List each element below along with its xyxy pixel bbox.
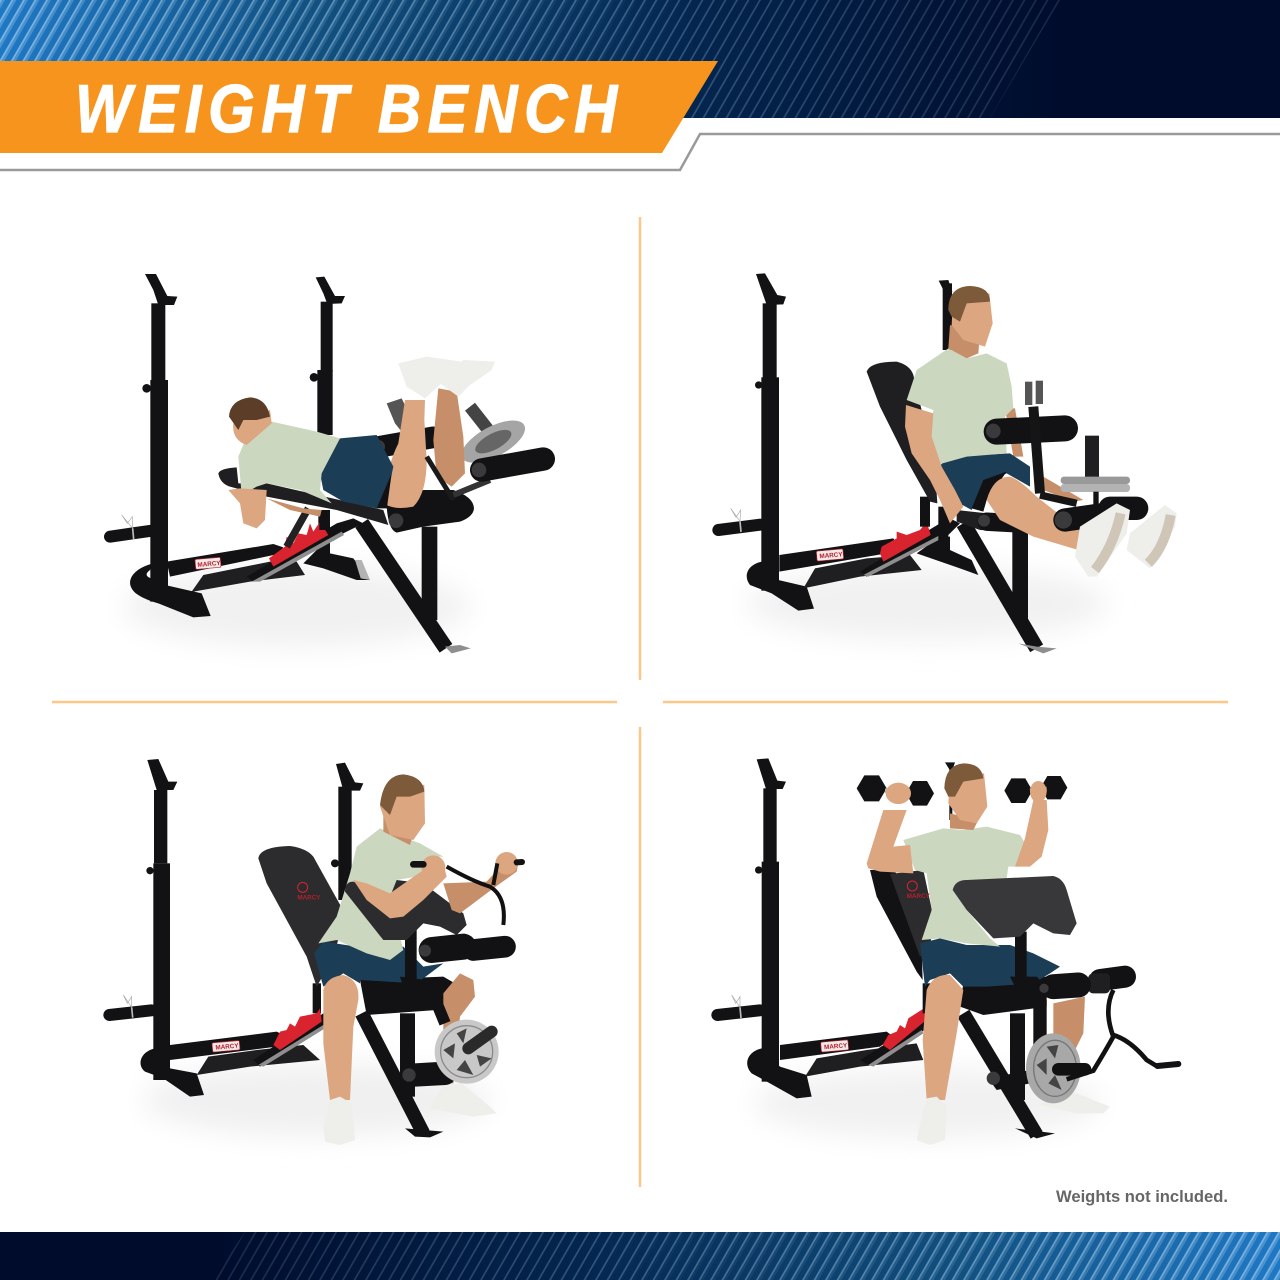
bench legs and seat xyxy=(960,977,1055,1138)
forearm under pad xyxy=(267,498,322,517)
man body xyxy=(314,774,497,1145)
black roller mass under thighs xyxy=(387,490,474,533)
near shoe xyxy=(917,1097,947,1145)
red adjuster and rail xyxy=(860,983,931,1067)
rear rack sliver xyxy=(945,762,955,820)
bench legs xyxy=(362,523,471,653)
front rack upright and weight horn xyxy=(718,273,922,611)
bench backrest with logo: MARCY xyxy=(297,894,321,901)
disclaimer note: Weights not included. xyxy=(1056,1187,1228,1206)
panel 2: leg extension, seated man xyxy=(718,273,1177,653)
near leg xyxy=(386,400,427,508)
face xyxy=(233,410,272,445)
neck xyxy=(948,325,980,358)
neck xyxy=(950,813,978,830)
bench backrest with logo xyxy=(258,846,347,987)
shorts xyxy=(314,942,443,987)
orange panel dividers xyxy=(52,217,1228,1187)
rear rack upright xyxy=(331,763,363,900)
title ribbon xyxy=(0,61,718,153)
far leg xyxy=(1043,477,1083,502)
lower roller end and front rollers xyxy=(389,457,543,528)
weight plate and curl bar xyxy=(1026,990,1178,1103)
floor shadow xyxy=(747,567,1107,640)
shirt xyxy=(238,422,340,503)
floor shadow xyxy=(123,567,470,647)
front rack upright and weight horn xyxy=(109,759,320,1097)
footer banner xyxy=(0,1232,1280,1280)
brand plate: MARCY xyxy=(215,1043,240,1052)
rollers xyxy=(1039,973,1125,993)
bench legs xyxy=(360,977,457,1137)
brand plate: MARCY xyxy=(824,1042,848,1051)
neck xyxy=(383,807,413,845)
panel 1: leg curl, man lying prone on bench xyxy=(110,274,543,653)
weight plate and horn xyxy=(435,1020,499,1084)
shirt xyxy=(903,827,1028,947)
near shoe xyxy=(398,357,462,398)
shirt xyxy=(318,828,443,960)
near shoe xyxy=(323,1097,355,1145)
hair xyxy=(380,774,424,815)
far leg xyxy=(1053,997,1085,1050)
bench backrest with logo: MARCY xyxy=(907,893,931,900)
far shoe xyxy=(430,1083,497,1117)
shorts xyxy=(920,938,1060,987)
rear rack upright xyxy=(303,277,370,580)
far shoe xyxy=(1040,1093,1110,1113)
far leg xyxy=(433,388,465,487)
raised arm right xyxy=(1015,800,1048,867)
hair xyxy=(944,763,983,797)
bench pad xyxy=(218,467,388,525)
floor shadow xyxy=(143,1063,490,1137)
face xyxy=(380,785,425,840)
man xyxy=(905,286,1083,550)
shorts xyxy=(937,453,1030,510)
preacher pad and column xyxy=(953,876,1077,1000)
face xyxy=(948,773,987,823)
far leg xyxy=(443,973,475,1083)
knee sleeve xyxy=(972,472,1007,512)
bench backrest xyxy=(867,362,937,503)
brand plate: MARCY xyxy=(819,551,844,560)
red adjuster and rail xyxy=(247,508,363,582)
brand plate xyxy=(195,557,222,569)
near arm xyxy=(905,405,963,523)
man body xyxy=(867,763,1110,1145)
front rack upright and weight horn xyxy=(717,758,923,1098)
preacher pad and column xyxy=(345,880,467,1023)
raised arm left xyxy=(867,810,913,873)
face xyxy=(952,293,993,347)
man xyxy=(228,357,495,533)
header white cut and grey rule xyxy=(0,118,1280,180)
undershorts xyxy=(377,473,392,508)
bench legs xyxy=(963,523,1057,653)
bench seat and roller xyxy=(957,510,1017,532)
arm xyxy=(228,488,267,528)
leg attachment behind man xyxy=(372,398,531,471)
shoes xyxy=(440,360,495,397)
hair xyxy=(229,397,270,430)
near leg xyxy=(323,975,358,1100)
panel 3: preacher curl, seated man xyxy=(109,759,522,1145)
curl bar xyxy=(413,862,522,925)
brand plate xyxy=(816,549,844,561)
dumbbell left xyxy=(857,775,934,806)
brand plate xyxy=(212,1040,240,1052)
brand plate: MARCY xyxy=(197,560,222,569)
shoes xyxy=(1075,503,1177,577)
leg attachment with plates xyxy=(986,381,1137,529)
shirt xyxy=(907,348,1013,465)
dumbbell right xyxy=(1004,776,1067,803)
hair xyxy=(948,286,990,322)
far arm xyxy=(1005,408,1023,457)
title ribbon: WEIGHT BENCH xyxy=(75,70,624,147)
brand plate xyxy=(821,1040,849,1052)
rollers xyxy=(402,945,505,1082)
arms and hands xyxy=(353,852,518,918)
red adjuster and rail xyxy=(860,497,960,577)
floor shadow xyxy=(753,1068,1100,1138)
header banner background xyxy=(0,0,1280,118)
bench backrest with logo xyxy=(870,870,933,980)
panel 4: shoulder press with dumbbells xyxy=(717,758,1178,1145)
front rack upright and weight horn xyxy=(110,274,305,617)
rear rack upright xyxy=(917,280,978,575)
near leg xyxy=(987,477,1083,550)
near leg xyxy=(923,975,963,1100)
red adjuster and rail xyxy=(253,983,330,1067)
shorts xyxy=(320,435,393,508)
